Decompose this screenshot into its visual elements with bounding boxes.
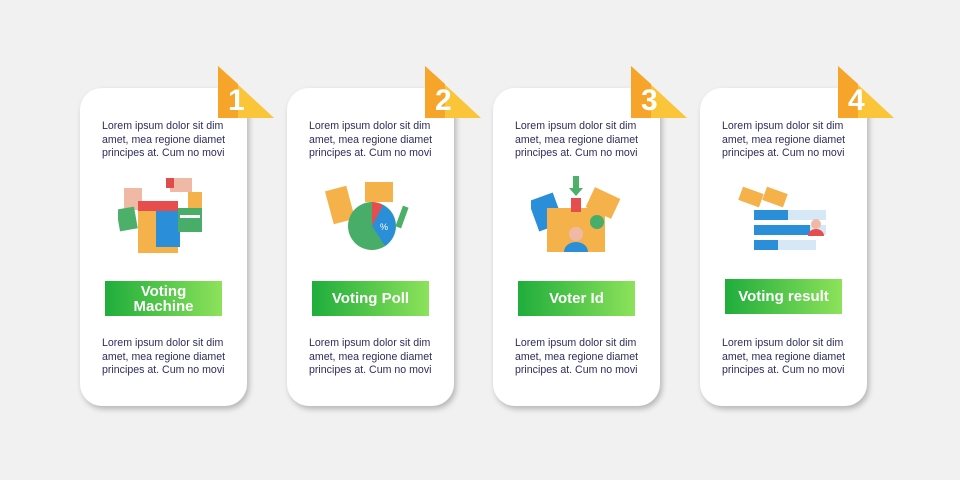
icon: voting poll pie: % [380, 222, 388, 232]
button: Voter Id: Voter Id [549, 290, 604, 307]
button: Voting Machine [105, 281, 222, 316]
text block bottom: Lorem ipsum dolor sit dim amet, mea regione diamet principes at. Cum no movi [515, 337, 638, 376]
button: Voting Poll [312, 281, 429, 316]
icon: voting poll pie [325, 182, 409, 250]
button: Voting Machine: Machine [133, 298, 194, 314]
icon: voting result bars [738, 186, 826, 250]
text block top: Lorem ipsum dolor sit dim amet, mea regione diamet principes at. Cum no movi [102, 120, 225, 159]
fold: number 2: 2 [435, 84, 452, 117]
fold: number 4 [838, 66, 894, 118]
text block top: Lorem ipsum dolor sit dim amet, mea regione diamet principes at. Cum no movi [515, 120, 638, 159]
text block bottom: Lorem ipsum dolor sit dim amet, mea regione diamet principes at. Cum no movi [722, 337, 845, 376]
text block top: Lorem ipsum dolor sit dim amet, mea regione diamet principes at. Cum no movi [309, 120, 432, 159]
button: Voting Poll: Voting Poll [332, 290, 409, 307]
fold: number 2 [425, 66, 481, 118]
card 4 [700, 88, 867, 406]
button: Voting result: Voting result [738, 288, 829, 305]
button: Voting Machine: Voting [141, 282, 186, 300]
fold: number 3: 3 [641, 84, 658, 117]
text block bottom: Lorem ipsum dolor sit dim amet, mea regione diamet principes at. Cum no movi [102, 337, 225, 376]
icon: voter id [531, 176, 620, 252]
icon: voting machine [118, 178, 202, 253]
button: Voter Id [518, 281, 635, 316]
fold: number 1: 1 [228, 84, 245, 117]
fold: number 4: 4 [848, 84, 865, 117]
fold: number 1 [218, 66, 274, 118]
button: Voting result [725, 279, 842, 314]
fold: number 3 [631, 66, 687, 118]
text block bottom: Lorem ipsum dolor sit dim amet, mea regione diamet principes at. Cum no movi [309, 337, 432, 376]
card 1 [80, 88, 247, 406]
card 2 [287, 88, 454, 406]
card 3 [493, 88, 660, 406]
text block top: Lorem ipsum dolor sit dim amet, mea regione diamet principes at. Cum no movi [722, 120, 845, 159]
